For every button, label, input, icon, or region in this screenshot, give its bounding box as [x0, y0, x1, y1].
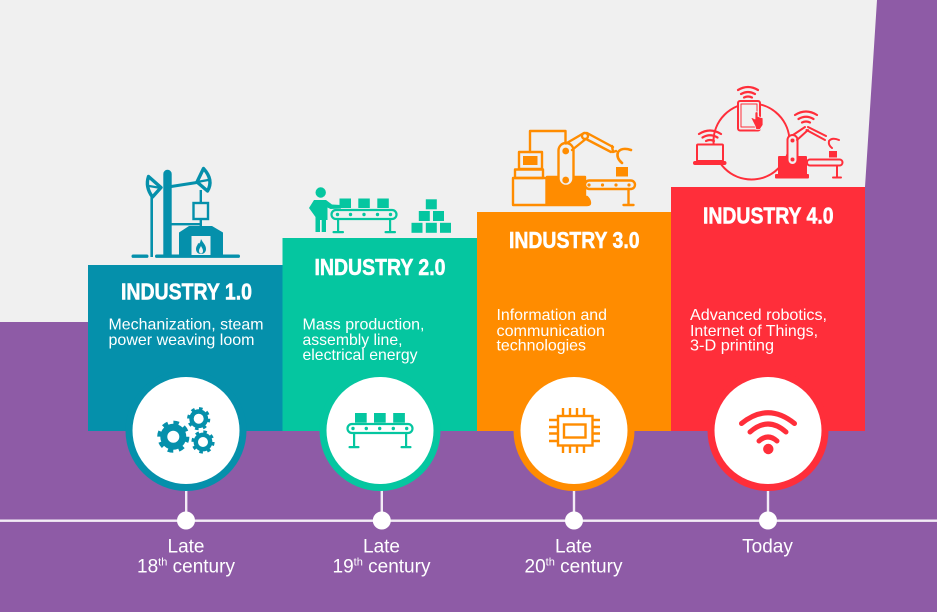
panel: Industry 1.0	[88, 265, 282, 431]
medallion: conveyor	[320, 370, 440, 491]
date label: late 20th century: 20	[525, 557, 546, 578]
date label: late 18th century: Late	[168, 537, 204, 558]
date label: late 20th century: century	[555, 557, 623, 578]
icon: wifi	[742, 413, 794, 454]
heading: Industry 1.0: INDUSTRY 1.0	[121, 278, 252, 304]
date label: late 19th century: Late	[363, 537, 400, 558]
date label: late 19th century: 19	[333, 557, 354, 578]
text: Industry 4.0 description	[690, 307, 827, 354]
text: Industry 4.0 description: 3-D printing	[690, 338, 774, 354]
text: Industry 3.0 description: technologies	[496, 338, 586, 354]
text: Industry 2.0 description: assembly line,	[302, 332, 402, 349]
icon: pump engine and furnace	[132, 168, 240, 258]
icon: laptop wifi	[699, 130, 721, 141]
text: Industry 1.0 description: power weaving loom	[108, 332, 254, 349]
text: Industry 2.0 description	[302, 316, 424, 364]
icon: robot wifi	[795, 112, 817, 122]
heading: Industry 4.0: INDUSTRY 4.0	[703, 203, 834, 229]
date label: late 18th century: century	[167, 557, 235, 578]
date label: today: Today	[742, 537, 793, 558]
date label: late 19th century	[333, 537, 431, 578]
text: Industry 1.0 description: Mechanization, steam	[108, 316, 264, 333]
date label: late 20th century	[525, 537, 623, 578]
text: Industry 4.0 description: Advanced robotics,	[690, 307, 827, 324]
icon: tablet	[738, 101, 763, 130]
icon: laptop	[694, 144, 726, 164]
icon: computer and robot arm	[513, 131, 635, 205]
date label: late 18th century: 18	[137, 557, 158, 578]
heading: Industry 2.0: INDUSTRY 2.0	[314, 254, 446, 280]
icon: stacked boxes	[412, 199, 451, 233]
text: Industry 3.0 description: Information and	[496, 307, 607, 324]
date label: late 19th century: century	[363, 557, 431, 578]
date label: late 19th century: th	[354, 557, 363, 569]
panel: Industry 4.0	[671, 187, 865, 431]
icon: microchip	[549, 408, 600, 453]
icon: connected devices and robot	[694, 87, 842, 180]
text: Industry 1.0 description	[108, 316, 264, 349]
icon: tablet wifi	[738, 87, 758, 98]
text: Industry 3.0 description: communication	[496, 323, 605, 340]
icon: gears	[159, 408, 213, 452]
panel: Industry 2.0	[282, 238, 477, 431]
date label: late 20th century: Late	[555, 537, 592, 558]
date label: late 18th century	[137, 537, 235, 578]
timeline line	[0, 488, 937, 522]
text: Industry 4.0 description: Internet of Things,	[690, 323, 818, 340]
text: Industry 2.0 description: Mass production,	[302, 316, 424, 334]
date label: late 18th century: th	[158, 557, 167, 569]
icon: conveyor belt	[348, 413, 412, 448]
text: Industry 3.0 description	[496, 307, 607, 354]
text: Industry 2.0 description: electrical energy	[302, 347, 418, 364]
date label: late 20th century: th	[546, 557, 555, 569]
medallion: gears	[126, 370, 246, 491]
medallion: chip	[514, 370, 634, 491]
icon: worker and assembly line	[309, 187, 451, 233]
icon: robot and conveyor	[776, 127, 842, 178]
timeline markers	[177, 512, 777, 530]
panel: Industry 3.0	[477, 212, 671, 431]
medallion: wifi	[708, 370, 828, 491]
heading: Industry 3.0: INDUSTRY 3.0	[509, 227, 640, 253]
